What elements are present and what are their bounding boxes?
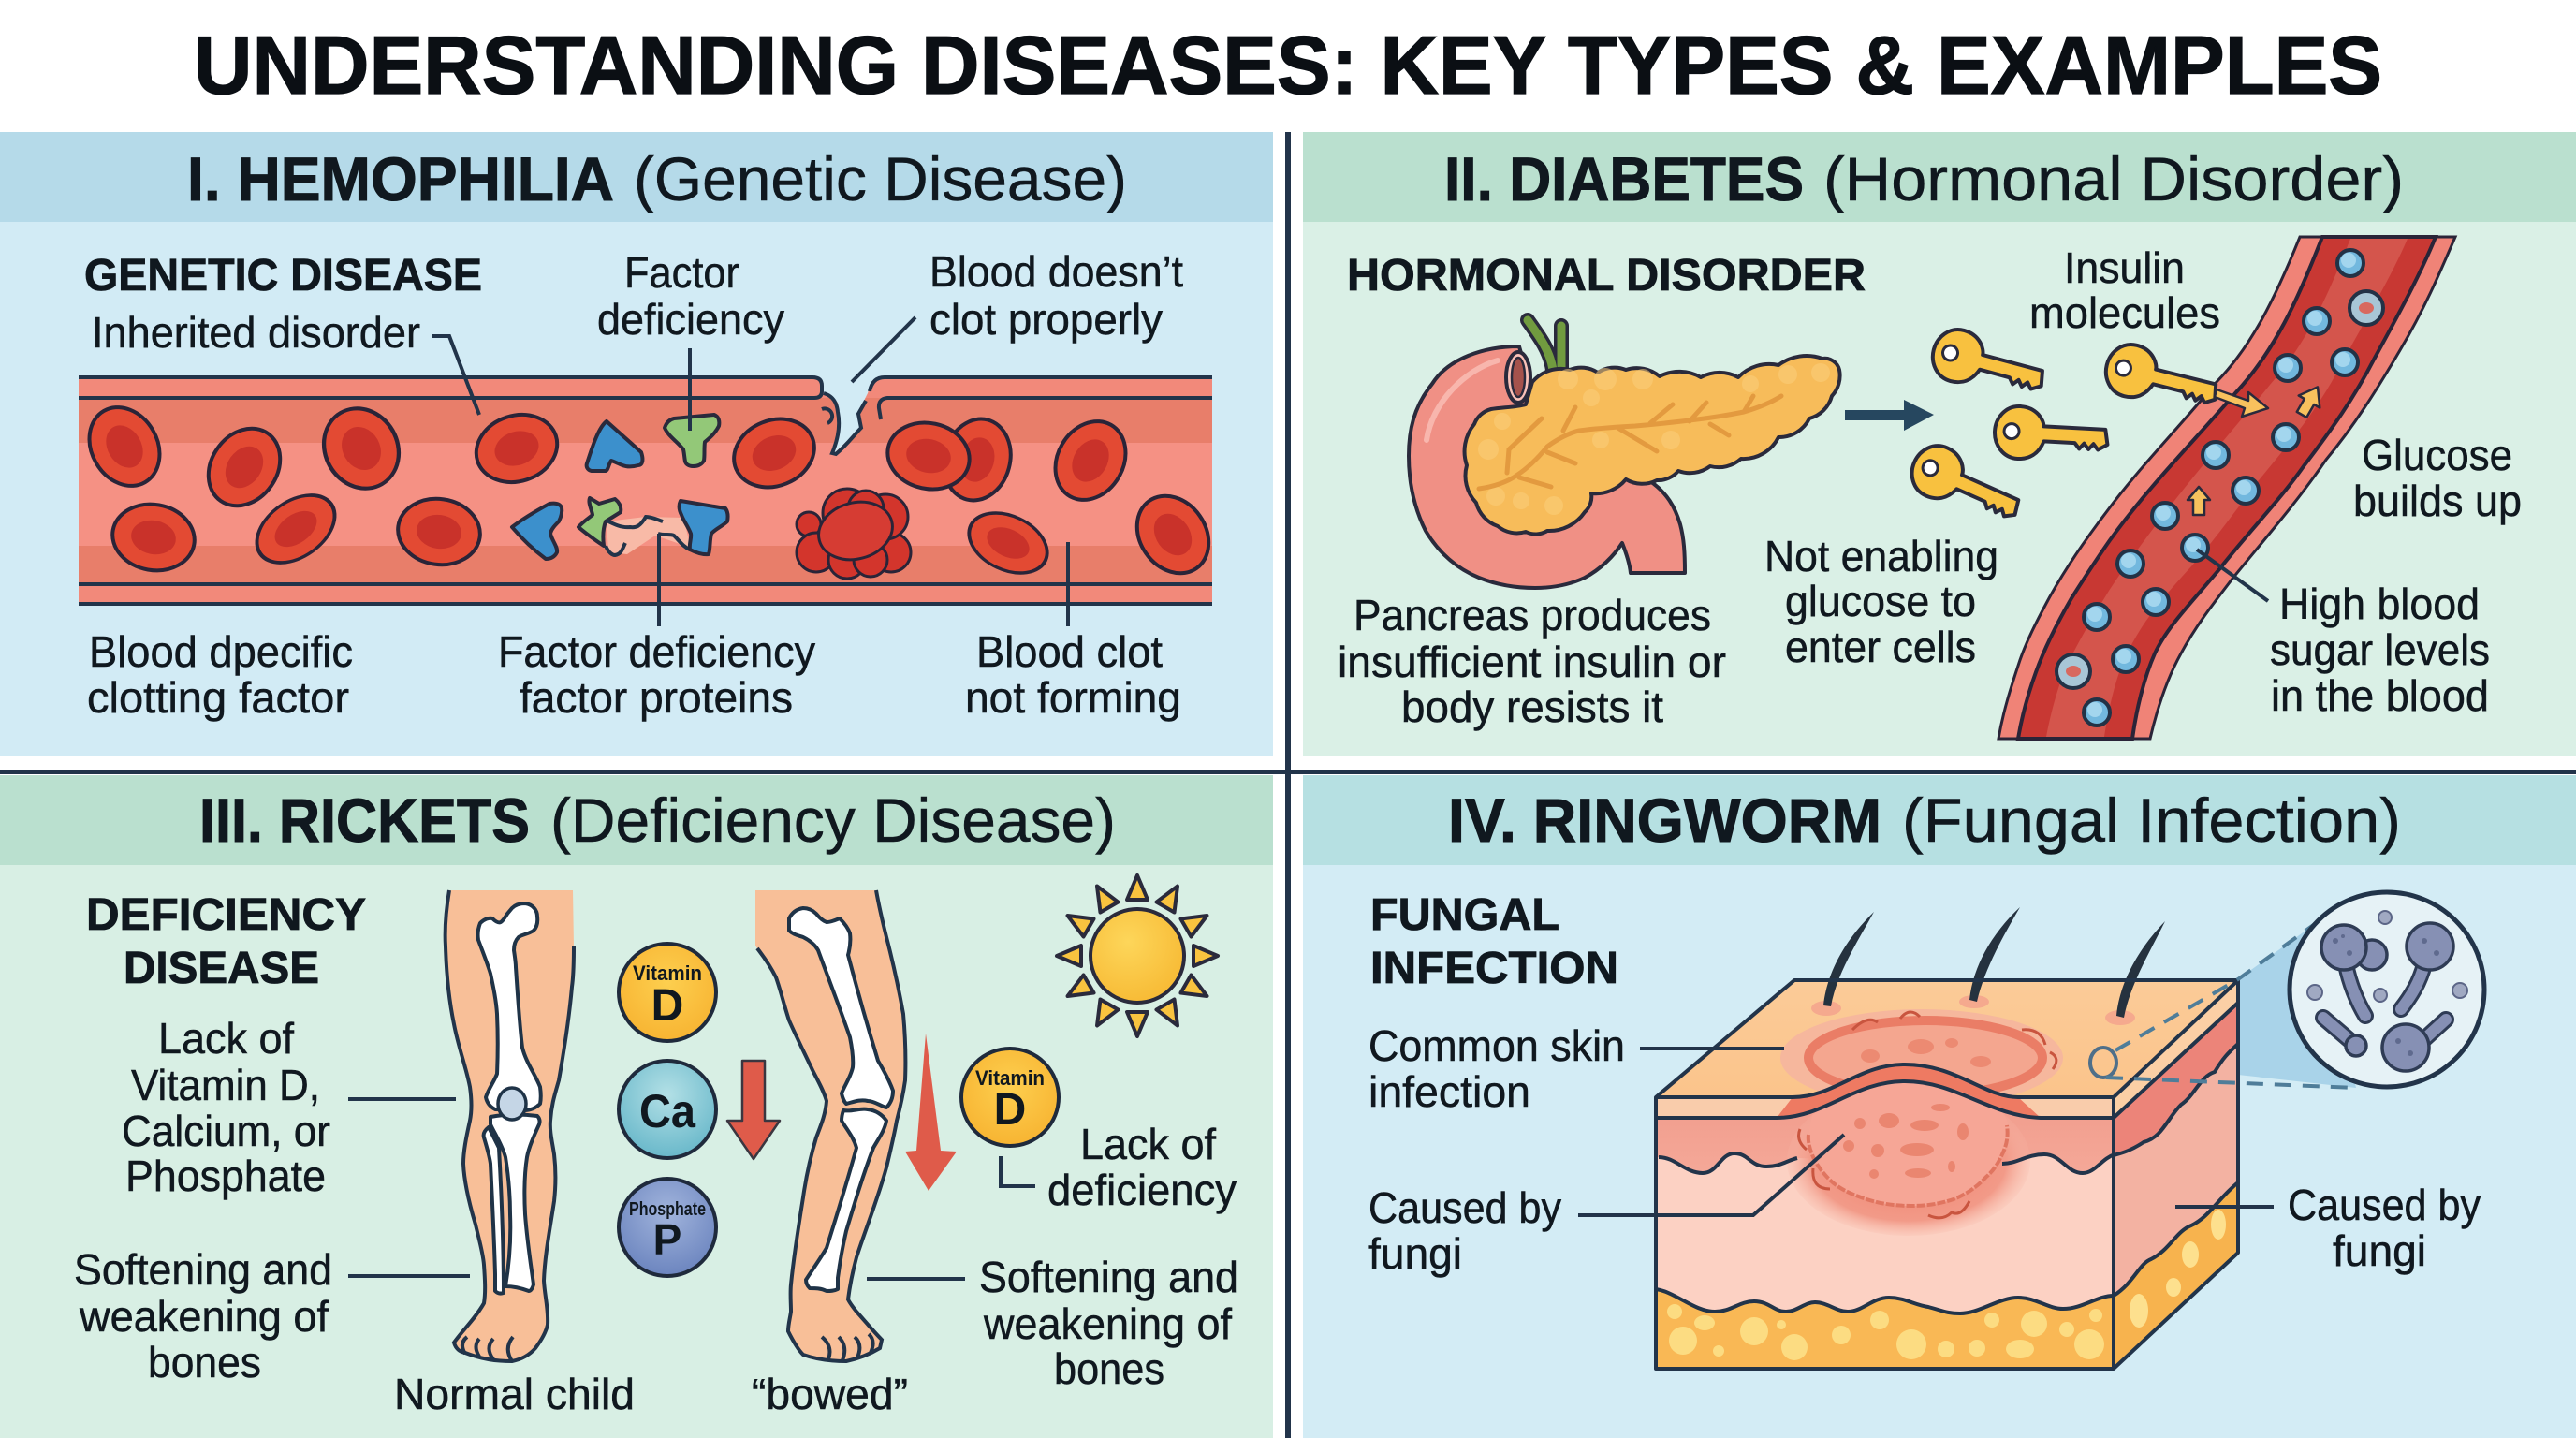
heading: hemophilia: (Genetic Disease) [634, 144, 1127, 213]
label: factor proteins: factor proteins [520, 673, 793, 722]
label: lack of deficiency: Lack of [1080, 1120, 1216, 1168]
magnify marker and dashes [2090, 921, 2356, 1088]
label: blood clot: not forming [965, 673, 1181, 722]
label: high blood sugar [2270, 580, 2490, 720]
heading: diabetes: II. DIABETES [1444, 144, 1804, 213]
label: blood does not clot [929, 247, 1183, 344]
label: softening left: Softening and [74, 1245, 332, 1294]
subheading: deficiency disease: DISEASE [124, 944, 319, 993]
heading: diabetes [1303, 132, 2576, 222]
label: common skin infection [1368, 1021, 1625, 1116]
label: glucose builds up: builds up [2353, 477, 2522, 525]
label: clotting factor [87, 627, 353, 722]
label: pancreas produces: body resists it [1401, 682, 1663, 731]
nutrient: phosphate: Phosphate [629, 1199, 706, 1220]
nutrient: vitamin D [619, 944, 716, 1041]
label: softening left [74, 1245, 332, 1387]
label: bowed: “bowed” [752, 1370, 908, 1418]
label: glucose builds up [2353, 431, 2522, 525]
label: lack of vitamin D: Vitamin D, [131, 1061, 320, 1109]
skin block [1656, 907, 2238, 1376]
heading: ringworm: IV. RINGWORM [1448, 785, 1881, 855]
label: inherited disorder: Inherited disorder [92, 308, 420, 357]
arrow: bones soften down [905, 1034, 957, 1191]
heading: rickets: III. RICKETS [199, 785, 530, 855]
label: not enabling glucose: enter cells [1785, 623, 1976, 671]
subheading: fungal infection: INFECTION [1370, 944, 1618, 993]
subheading: deficiency disease [86, 890, 366, 993]
label: lack of vitamin D: Calcium, or [122, 1107, 330, 1155]
label: blood clot [965, 627, 1181, 722]
nutrient: phosphate: P [653, 1215, 681, 1264]
label: softening left: weakening of [79, 1292, 329, 1341]
label: normal child: Normal child [394, 1370, 635, 1418]
pointer lines [1578, 1049, 2274, 1215]
arrow: pancreas to insulin [1845, 400, 1934, 431]
label: lack of vitamin D: Lack of [158, 1014, 294, 1063]
heading: ringworm: (Fungal Infection) [1902, 785, 2401, 855]
nutrient: calcium: Ca [639, 1085, 696, 1137]
subheading: deficiency disease: DEFICIENCY [86, 890, 366, 940]
heading: hemophilia [0, 132, 1273, 222]
label: not enabling glucose [1764, 532, 1998, 671]
label: not enabling glucose: Not enabling [1764, 532, 1998, 580]
label: factor deficiency [597, 248, 784, 344]
normal leg [446, 890, 574, 1361]
subheading: genetic disease: GENETIC DISEASE [84, 251, 482, 301]
label: caused by fungi left: Caused by [1368, 1183, 1561, 1232]
label: clotting factor: Blood dpecific [89, 627, 353, 676]
pointer lines [432, 317, 1068, 626]
label: lack of vitamin D: Phosphate [125, 1152, 326, 1200]
label: caused by fungi left: fungi [1368, 1229, 1462, 1278]
pancreas illustration [1409, 320, 1840, 588]
label: factor deficiency: Factor [624, 248, 739, 297]
label: softening right [979, 1253, 1238, 1393]
panel: diabetes [1303, 132, 2576, 756]
nutrient: vitamin D: D [651, 981, 683, 1031]
label: lack of deficiency: deficiency [1047, 1166, 1237, 1214]
label: caused by fungi right: Caused by [2288, 1181, 2481, 1229]
blood vessel with glucose [1998, 237, 2455, 739]
red blood cells [76, 394, 1223, 587]
label: common skin infection: Common skin [1368, 1021, 1625, 1070]
label: pancreas produces [1338, 591, 1726, 731]
heading: rickets [0, 775, 1273, 865]
heading: diabetes: (Hormonal Disorder) [1823, 144, 2404, 213]
insulin keys [1904, 324, 2109, 532]
label: caused by fungi right [2288, 1181, 2481, 1275]
label: blood does not clot: Blood doesn’t [929, 247, 1183, 296]
label: caused by fungi right: fungi [2333, 1226, 2426, 1275]
heading: rickets: (Deficiency Disease) [550, 785, 1116, 855]
label: blood does not clot: clot properly [929, 295, 1163, 344]
label: lack of deficiency [1047, 1120, 1237, 1214]
label: glucose builds up: Glucose [2362, 431, 2512, 479]
panel: rickets [0, 775, 1273, 1438]
arrow: nutrients down [727, 1061, 780, 1159]
clotting factor proteins [512, 415, 728, 559]
pointer: high blood sugar [2197, 550, 2268, 601]
panel: ringworm [1303, 775, 2576, 1438]
label: softening right: Softening and [979, 1253, 1238, 1301]
blood vessel [79, 374, 1212, 604]
nutrient: vitamin D: Vitamin [633, 961, 702, 985]
nutrient: vitamin D right: Vitamin [975, 1066, 1045, 1090]
label: not enabling glucose: glucose to [1785, 577, 1976, 625]
label: pancreas produces: Pancreas produces [1354, 591, 1711, 639]
pointer lines [348, 1099, 1035, 1279]
label: softening right: bones [1054, 1344, 1164, 1393]
label: pancreas produces: insufficient insulin or [1338, 638, 1726, 686]
label: factor proteins [498, 627, 815, 722]
subheading: hormonal disorder: HORMONAL DISORDER [1347, 251, 1866, 301]
nutrient: vitamin D right: D [994, 1085, 1026, 1135]
icon: sun [1057, 875, 1218, 1036]
heading: ringworm [1303, 775, 2576, 865]
label: common skin infection: infection [1368, 1067, 1530, 1116]
panel: hemophilia [0, 132, 1273, 756]
nutrient: vitamin D right [961, 1049, 1059, 1146]
label: softening left: bones [148, 1338, 261, 1387]
subheading: fungal infection [1370, 890, 1618, 993]
blood clot [797, 489, 911, 579]
label: factor proteins: Factor deficiency [498, 627, 815, 676]
subheading: fungal infection: FUNGAL [1370, 890, 1559, 940]
nutrient: phosphate [619, 1179, 716, 1276]
heading: hemophilia: I. HEMOPHILIA [187, 144, 614, 213]
nutrient: calcium [619, 1061, 716, 1158]
magnified fungi circle [2290, 892, 2484, 1087]
label: lack of vitamin D [122, 1014, 330, 1200]
magnifying cone [2238, 921, 2356, 1088]
yellow arrows [2188, 381, 2328, 515]
label: softening right: weakening of [983, 1299, 1232, 1348]
label: factor deficiency: deficiency [597, 295, 784, 344]
label: clotting factor: clotting factor [87, 673, 349, 722]
label: high blood sugar: sugar levels [2270, 625, 2490, 674]
label: insulin molecules: Insulin [2064, 243, 2185, 292]
insulin key at vessel [2100, 340, 2223, 418]
title: UNDERSTANDING DISEASES: KEY TYPES & EXAMPLES [194, 19, 2382, 111]
label: high blood sugar: in the blood [2271, 671, 2489, 720]
label: insulin molecules [2029, 243, 2220, 337]
label: insulin molecules: molecules [2029, 288, 2220, 337]
label: caused by fungi left [1368, 1183, 1561, 1278]
label: high blood sugar: High blood [2279, 580, 2480, 628]
bowed leg [755, 890, 905, 1361]
label: blood clot: Blood clot [976, 627, 1163, 676]
